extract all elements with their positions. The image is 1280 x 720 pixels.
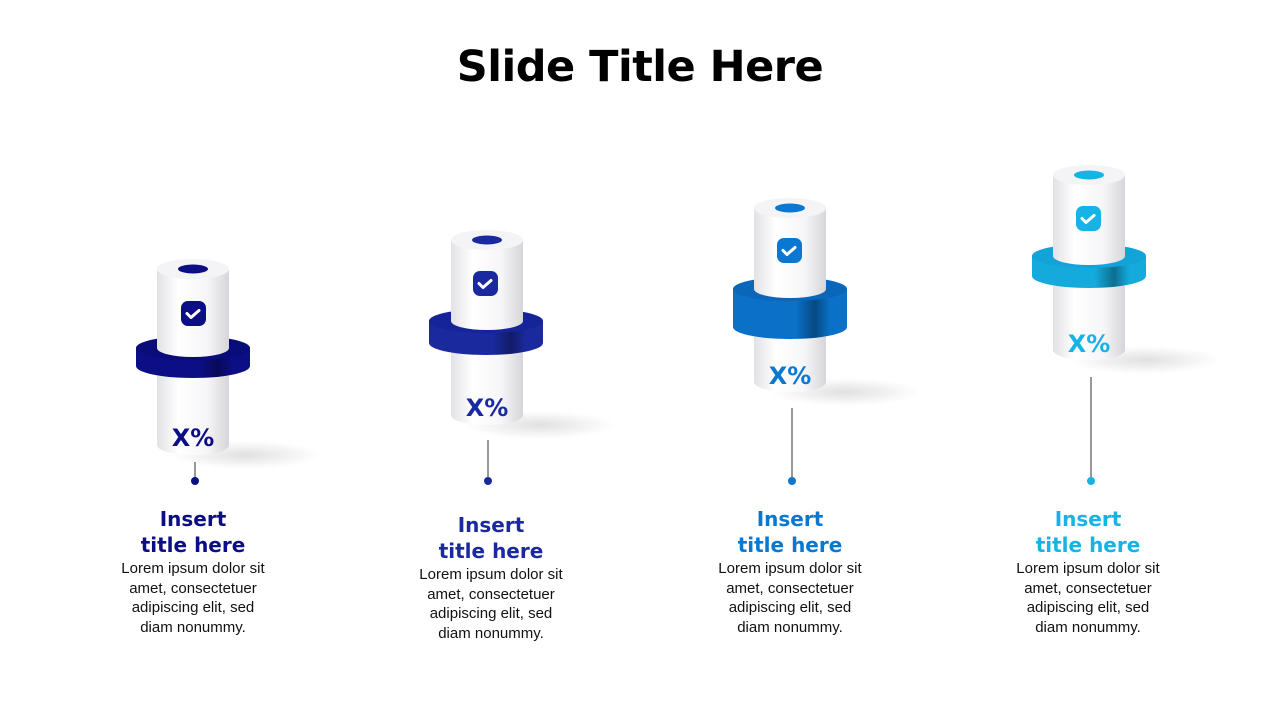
column 2 graphic — [429, 230, 615, 485]
text block 4: title here — [1036, 533, 1140, 557]
icon: check — [1076, 206, 1101, 231]
text block 3: diam nonummy. — [737, 618, 843, 636]
text block 3: title here — [738, 533, 842, 557]
column 3 graphic — [733, 198, 920, 485]
text block 2: adipiscing elit, sed — [430, 605, 552, 622]
text block 2: title here — [439, 539, 543, 563]
column 1 graphic: X% — [172, 424, 214, 452]
text block 4: Insert — [1055, 507, 1121, 531]
column 4 graphic — [1032, 165, 1220, 485]
icon: check — [473, 271, 498, 296]
text block 4: adipiscing elit, sed — [1027, 599, 1149, 616]
column 3 graphic: X% — [769, 362, 811, 390]
text block 1: adipiscing elit, sed — [132, 599, 254, 616]
text block 3: Lorem ipsum dolor sit — [718, 560, 862, 577]
text block 4: amet, consectetuer — [1024, 580, 1152, 596]
text block 2 — [419, 513, 563, 642]
text block 3: Insert — [757, 507, 823, 531]
text block 1: Insert — [160, 507, 226, 531]
column 1 graphic — [136, 259, 320, 485]
text block 1: amet, consectetuer — [129, 580, 257, 596]
text block 1 — [121, 507, 265, 636]
title: Slide Title Here — [457, 42, 823, 92]
text block 3: adipiscing elit, sed — [729, 599, 851, 616]
text block 4 — [1016, 507, 1160, 636]
icon: check — [181, 301, 206, 326]
text block 2: diam nonummy. — [438, 624, 544, 642]
text block 3: amet, consectetuer — [726, 580, 854, 596]
text block 4: Lorem ipsum dolor sit — [1016, 560, 1160, 577]
text block 1: title here — [141, 533, 245, 557]
text block 2: Insert — [458, 513, 524, 537]
text block 2: Lorem ipsum dolor sit — [419, 566, 563, 583]
text block 1: diam nonummy. — [140, 618, 246, 636]
icon: check — [777, 238, 802, 263]
text block 1: Lorem ipsum dolor sit — [121, 560, 265, 577]
text block 4: diam nonummy. — [1035, 618, 1141, 636]
text block 2: amet, consectetuer — [427, 586, 555, 602]
column 4 graphic: X% — [1068, 330, 1110, 358]
text block 3 — [718, 507, 862, 636]
column 2 graphic: X% — [466, 394, 508, 422]
